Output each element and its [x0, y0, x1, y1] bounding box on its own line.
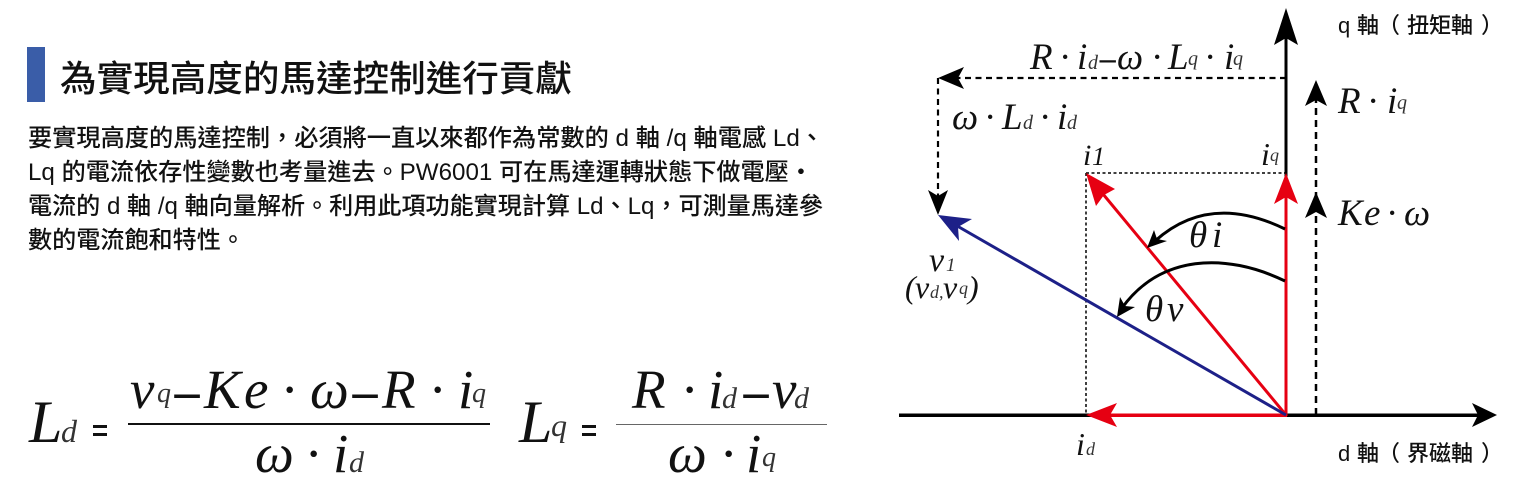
label: R iq: ·	[1368, 81, 1377, 122]
label: voltage sum: q	[1188, 48, 1198, 70]
vector: current i1	[1086, 173, 1286, 415]
label: voltage sum: i	[1077, 37, 1087, 78]
label: voltage sum: R	[1029, 37, 1053, 78]
heading text: 為實現高度的馬達控制進行貢獻	[60, 58, 572, 99]
label: voltage sum: ·	[1060, 37, 1069, 78]
formula: Lq: q	[551, 407, 567, 443]
label: v1: 1	[946, 255, 956, 276]
label: R iq: q	[1397, 92, 1407, 114]
label: voltage sum: ·	[1152, 37, 1161, 78]
formula: Lq: d	[794, 382, 810, 415]
formula: Ld: –	[174, 363, 200, 419]
label: omega Ld id: d	[1067, 112, 1078, 134]
label: omega Ld id: ·	[1040, 97, 1049, 138]
formula: Lq: q	[762, 442, 776, 473]
vector: id	[1086, 403, 1287, 427]
formula: Lq: i	[708, 359, 723, 420]
label: theta i: i	[1212, 215, 1222, 256]
label: vd vq: q	[959, 278, 968, 298]
equals sign	[582, 425, 596, 436]
heading accent bar	[27, 47, 45, 102]
formula: Lq	[518, 359, 827, 484]
equals sign	[93, 425, 107, 436]
axis label: d: 軸	[1357, 441, 1379, 466]
label: i1: 1	[1092, 142, 1105, 171]
label: voltage sum: –	[1099, 40, 1116, 76]
axis label: d: d	[1338, 441, 1350, 466]
label: i1: i	[1083, 139, 1091, 172]
label: voltage sum: L	[1167, 37, 1189, 78]
label: theta i: θ	[1189, 215, 1207, 256]
d axis	[899, 403, 1497, 427]
axis label: q: q	[1338, 13, 1350, 38]
formula: Lq: i	[746, 423, 761, 484]
label: theta v: θ	[1145, 289, 1163, 330]
label: iq: q	[1270, 145, 1279, 165]
formula: Ld: K	[203, 359, 244, 420]
label: omega Ld id: L	[1001, 97, 1023, 138]
label: vd vq: )	[966, 269, 979, 305]
body paragraph: 數的電流飽和特性。	[28, 227, 245, 254]
label: id: d	[1086, 439, 1096, 459]
label: theta v: v	[1167, 289, 1184, 330]
dotted projections	[1086, 173, 1286, 415]
label: voltage sum: ·	[1205, 37, 1214, 78]
formula: Ld: ω	[310, 359, 349, 420]
formula: Lq: R	[631, 359, 666, 420]
axis label: d: （	[1378, 441, 1400, 466]
formula: Ld: d	[349, 446, 365, 479]
formula: Ld: L	[28, 389, 62, 455]
formula: Ld: ·	[306, 423, 320, 484]
label: R iq: i	[1387, 81, 1397, 122]
axis label: q: 扭矩軸	[1407, 13, 1473, 38]
formula: Lq: –	[743, 363, 769, 419]
formula: Ld: i	[458, 359, 473, 420]
label: id: i	[1076, 426, 1085, 462]
formula: Ld: –	[352, 363, 378, 419]
dashed path: horizontal and vertical voltage	[928, 67, 1286, 215]
axis label: d: 界磁軸	[1407, 441, 1473, 466]
body paragraph: 電流的 d 軸 /q 軸向量解析。利用此項功能實現計算 Ld、Lq，可測量馬達參	[28, 193, 823, 220]
formula: Ld: e	[244, 359, 268, 420]
formula: Ld: i	[333, 423, 348, 484]
label: voltage sum: i	[1224, 37, 1234, 78]
arc: theta v	[1117, 263, 1285, 317]
heading	[27, 47, 572, 102]
formula: Lq: ω	[668, 423, 707, 484]
label: voltage sum: d	[1088, 52, 1099, 74]
label: Ke omega: ·	[1387, 193, 1396, 234]
axis label: q: ）	[1481, 13, 1503, 38]
vector: voltage v1	[938, 215, 1286, 415]
formula: Ld	[28, 359, 490, 484]
axis label: q: 軸	[1357, 13, 1379, 38]
label: Ke omega: e	[1364, 193, 1380, 234]
formula: Ld: d	[61, 413, 78, 449]
formula: Ld: R	[381, 359, 416, 420]
axis label: q: （	[1378, 13, 1400, 38]
axis label: d: ）	[1481, 441, 1503, 466]
label: vd vq: v	[915, 269, 930, 305]
formula: Ld: ·	[430, 359, 444, 420]
formula: Ld: v	[130, 359, 155, 420]
q axis	[1274, 8, 1298, 180]
formula: Lq: ·	[682, 359, 696, 420]
label: v1: v	[929, 242, 945, 279]
label: Ke omega: K	[1337, 193, 1365, 234]
formula: Ld: ·	[282, 359, 296, 420]
label: Ke omega: ω	[1404, 193, 1430, 234]
body paragraph	[28, 125, 824, 254]
formula: Lq: ·	[721, 423, 735, 484]
label: omega Ld id: d	[1023, 112, 1034, 134]
body paragraph: Lq 的電流依存性變數也考量進去。PW6001 可在馬達運轉狀態下做電壓・	[28, 159, 813, 186]
label: vd vq: v	[943, 269, 958, 305]
vector diagram	[899, 8, 1503, 466]
formula: Ld: ω	[255, 423, 294, 484]
label: iq: i	[1261, 136, 1270, 172]
vector: iq	[1274, 173, 1298, 416]
label: omega Ld id: ω	[952, 97, 978, 138]
label: vd vq: (	[905, 269, 918, 305]
body paragraph: 要實現高度的馬達控制，必須將一直以來都作為常數的 d 軸 /q 軸電感 Ld、	[28, 125, 824, 152]
formula: Lq: d	[722, 382, 738, 415]
label: voltage sum: q	[1233, 48, 1243, 70]
arc: theta i	[1147, 213, 1285, 248]
formula: Ld: q	[472, 378, 486, 409]
label: omega Ld id: ·	[985, 97, 994, 138]
label: vd vq: d,	[930, 282, 944, 302]
formula: Ld: q	[157, 378, 171, 409]
formula: Lq: L	[518, 389, 552, 455]
label: R iq: R	[1337, 81, 1361, 122]
dashed path: resistance and back-EMF	[1305, 80, 1327, 415]
formula: Lq: v	[772, 359, 797, 420]
label: voltage sum: ω	[1117, 37, 1143, 78]
label: omega Ld id: i	[1057, 97, 1067, 138]
